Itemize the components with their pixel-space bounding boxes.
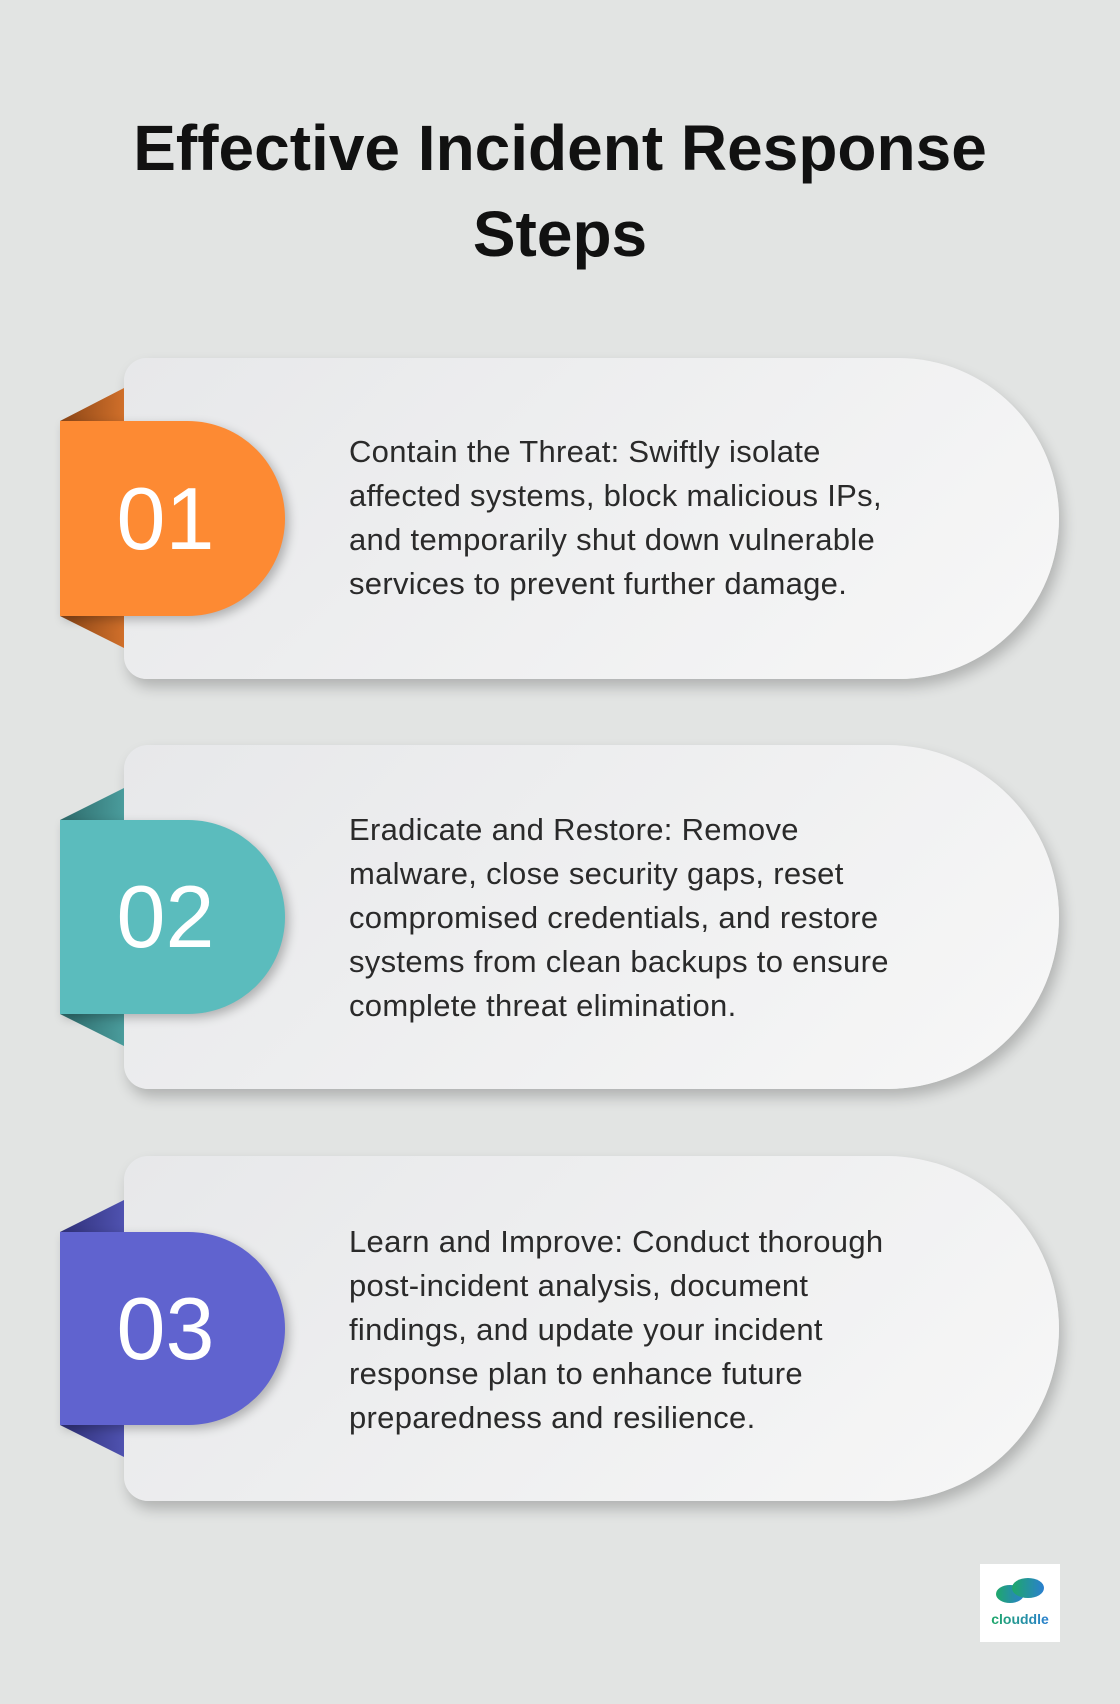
text 2: malware, close security gaps, reset <box>349 856 844 891</box>
badge 01: 01 <box>117 468 214 568</box>
card 2 <box>124 745 1059 1089</box>
badge 03: 03 <box>117 1278 214 1378</box>
card 1 <box>124 358 1059 679</box>
text 2: Eradicate and Restore: Remove <box>349 812 799 847</box>
text 3: preparedness and resilience. <box>349 1400 755 1435</box>
panel: step 1 <box>58 358 1070 694</box>
panel: step 2 <box>58 745 1070 1104</box>
title <box>133 112 987 270</box>
flap 2 <box>60 788 124 1046</box>
text 3: Learn and Improve: Conduct thorough <box>349 1224 883 1259</box>
text 1 <box>349 434 882 601</box>
badge 02 <box>60 820 285 1014</box>
card 3 <box>124 1156 1059 1501</box>
text 2: complete threat elimination. <box>349 988 736 1023</box>
badge 02: 02 <box>117 867 214 966</box>
text 1: affected systems, block malicious IPs, <box>349 478 882 513</box>
text 2 <box>349 812 889 1023</box>
logo <box>980 1564 1060 1642</box>
flap 3 <box>60 1200 124 1457</box>
panel: step 3 <box>58 1156 1070 1516</box>
text 2: systems from clean backups to ensure <box>349 944 889 979</box>
badge 01 <box>60 421 285 616</box>
badge 03 <box>60 1232 285 1425</box>
flap 1 <box>60 388 124 648</box>
text 3 <box>349 1224 883 1435</box>
logo: clouddle <box>991 1611 1049 1627</box>
title: Effective Incident Response <box>133 112 987 184</box>
text 1: Contain the Threat: Swiftly isolate <box>349 434 821 469</box>
title: Steps <box>473 198 647 270</box>
text 3: response plan to enhance future <box>349 1356 803 1391</box>
text 1: and temporarily shut down vulnerable <box>349 522 875 557</box>
text 3: findings, and update your incident <box>349 1312 823 1347</box>
text 1: services to prevent further damage. <box>349 566 847 601</box>
text 2: compromised credentials, and restore <box>349 900 878 935</box>
text 3: post-incident analysis, document <box>349 1268 808 1303</box>
